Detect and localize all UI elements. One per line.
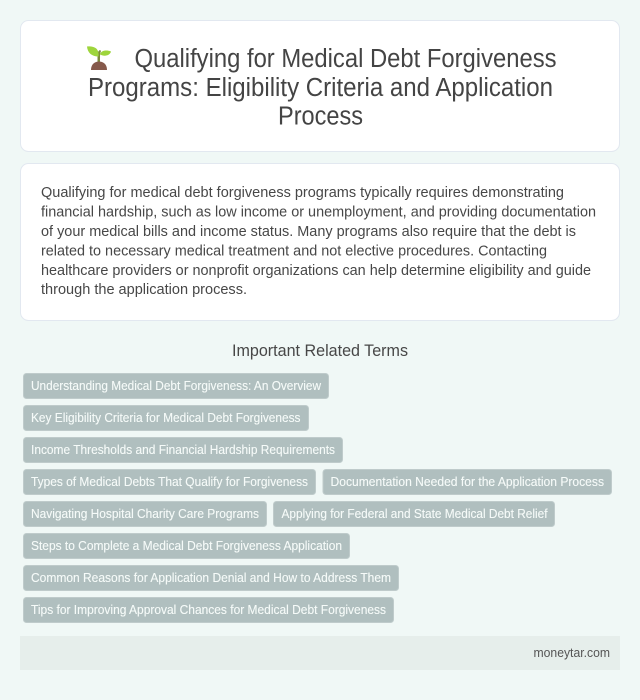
tag: eligibility: Key Eligibility Criteria for Medical Debt Forgiveness <box>31 410 301 425</box>
tag: approval tips <box>24 598 394 622</box>
tag: debt types: Types of Medical Debts That Qualify for Forgiveness <box>31 474 308 489</box>
tag: debt types <box>24 470 316 494</box>
tag: denial reasons <box>24 566 398 590</box>
tag: overview: Understanding Medical Debt Forgiveness: An Overview <box>31 378 322 393</box>
tag: federal and state relief <box>274 502 554 526</box>
text block: description: financial hardship, such as low income or unemployment, and providing documentation <box>41 204 596 220</box>
tag: approval tips: Tips for Improving Approval Chances for Medical Debt Forgiveness <box>31 602 386 617</box>
tag: charity care <box>24 502 266 526</box>
text block: description: through the application process. <box>41 281 247 298</box>
tag: denial reasons: Common Reasons for Application Denial and How to Address Them <box>31 570 391 585</box>
tag: documentation <box>323 470 612 494</box>
tag: documentation: Documentation Needed for the Application Process <box>330 474 604 489</box>
tag: income <box>24 438 342 462</box>
tag: federal and state relief: Applying for Federal and State Medical Debt Relief <box>282 506 548 521</box>
tag: income: Income Thresholds and Financial Hardship Requirements <box>31 442 335 457</box>
heading: title: Qualifying for Medical Debt Forgiveness <box>134 45 556 73</box>
tag list <box>24 374 612 622</box>
heading: title <box>88 45 556 130</box>
text block: description: related to necessary medical treatment and not elective procedures. Contacting <box>41 242 547 260</box>
text block: description: Qualifying for medical debt forgiveness programs typically requires demonstrating <box>41 184 564 201</box>
tag: eligibility <box>24 406 308 430</box>
icon: seedling <box>87 46 111 70</box>
footer: moneytar.com <box>534 645 610 660</box>
tag: application steps <box>24 534 350 558</box>
heading: title: Process <box>278 102 363 130</box>
tag: charity care: Navigating Hospital Charity Care Programs <box>31 506 259 521</box>
heading: important related terms: Important Related Terms <box>232 341 408 360</box>
text block: description: healthcare providers or nonprofit organizations can help determine eligibility and guide <box>41 262 591 279</box>
panel: description card <box>20 164 620 320</box>
tag: application steps: Steps to Complete a Medical Debt Forgiveness Application <box>31 538 342 553</box>
text block: description <box>41 184 596 298</box>
tag: overview <box>24 374 328 398</box>
text block: description: of your medical bills and income status. Many programs also require that the debt is <box>41 223 576 240</box>
panel: title card <box>20 20 620 152</box>
heading: title: Programs: Eligibility Criteria and Application <box>88 74 553 102</box>
footer <box>20 636 620 670</box>
